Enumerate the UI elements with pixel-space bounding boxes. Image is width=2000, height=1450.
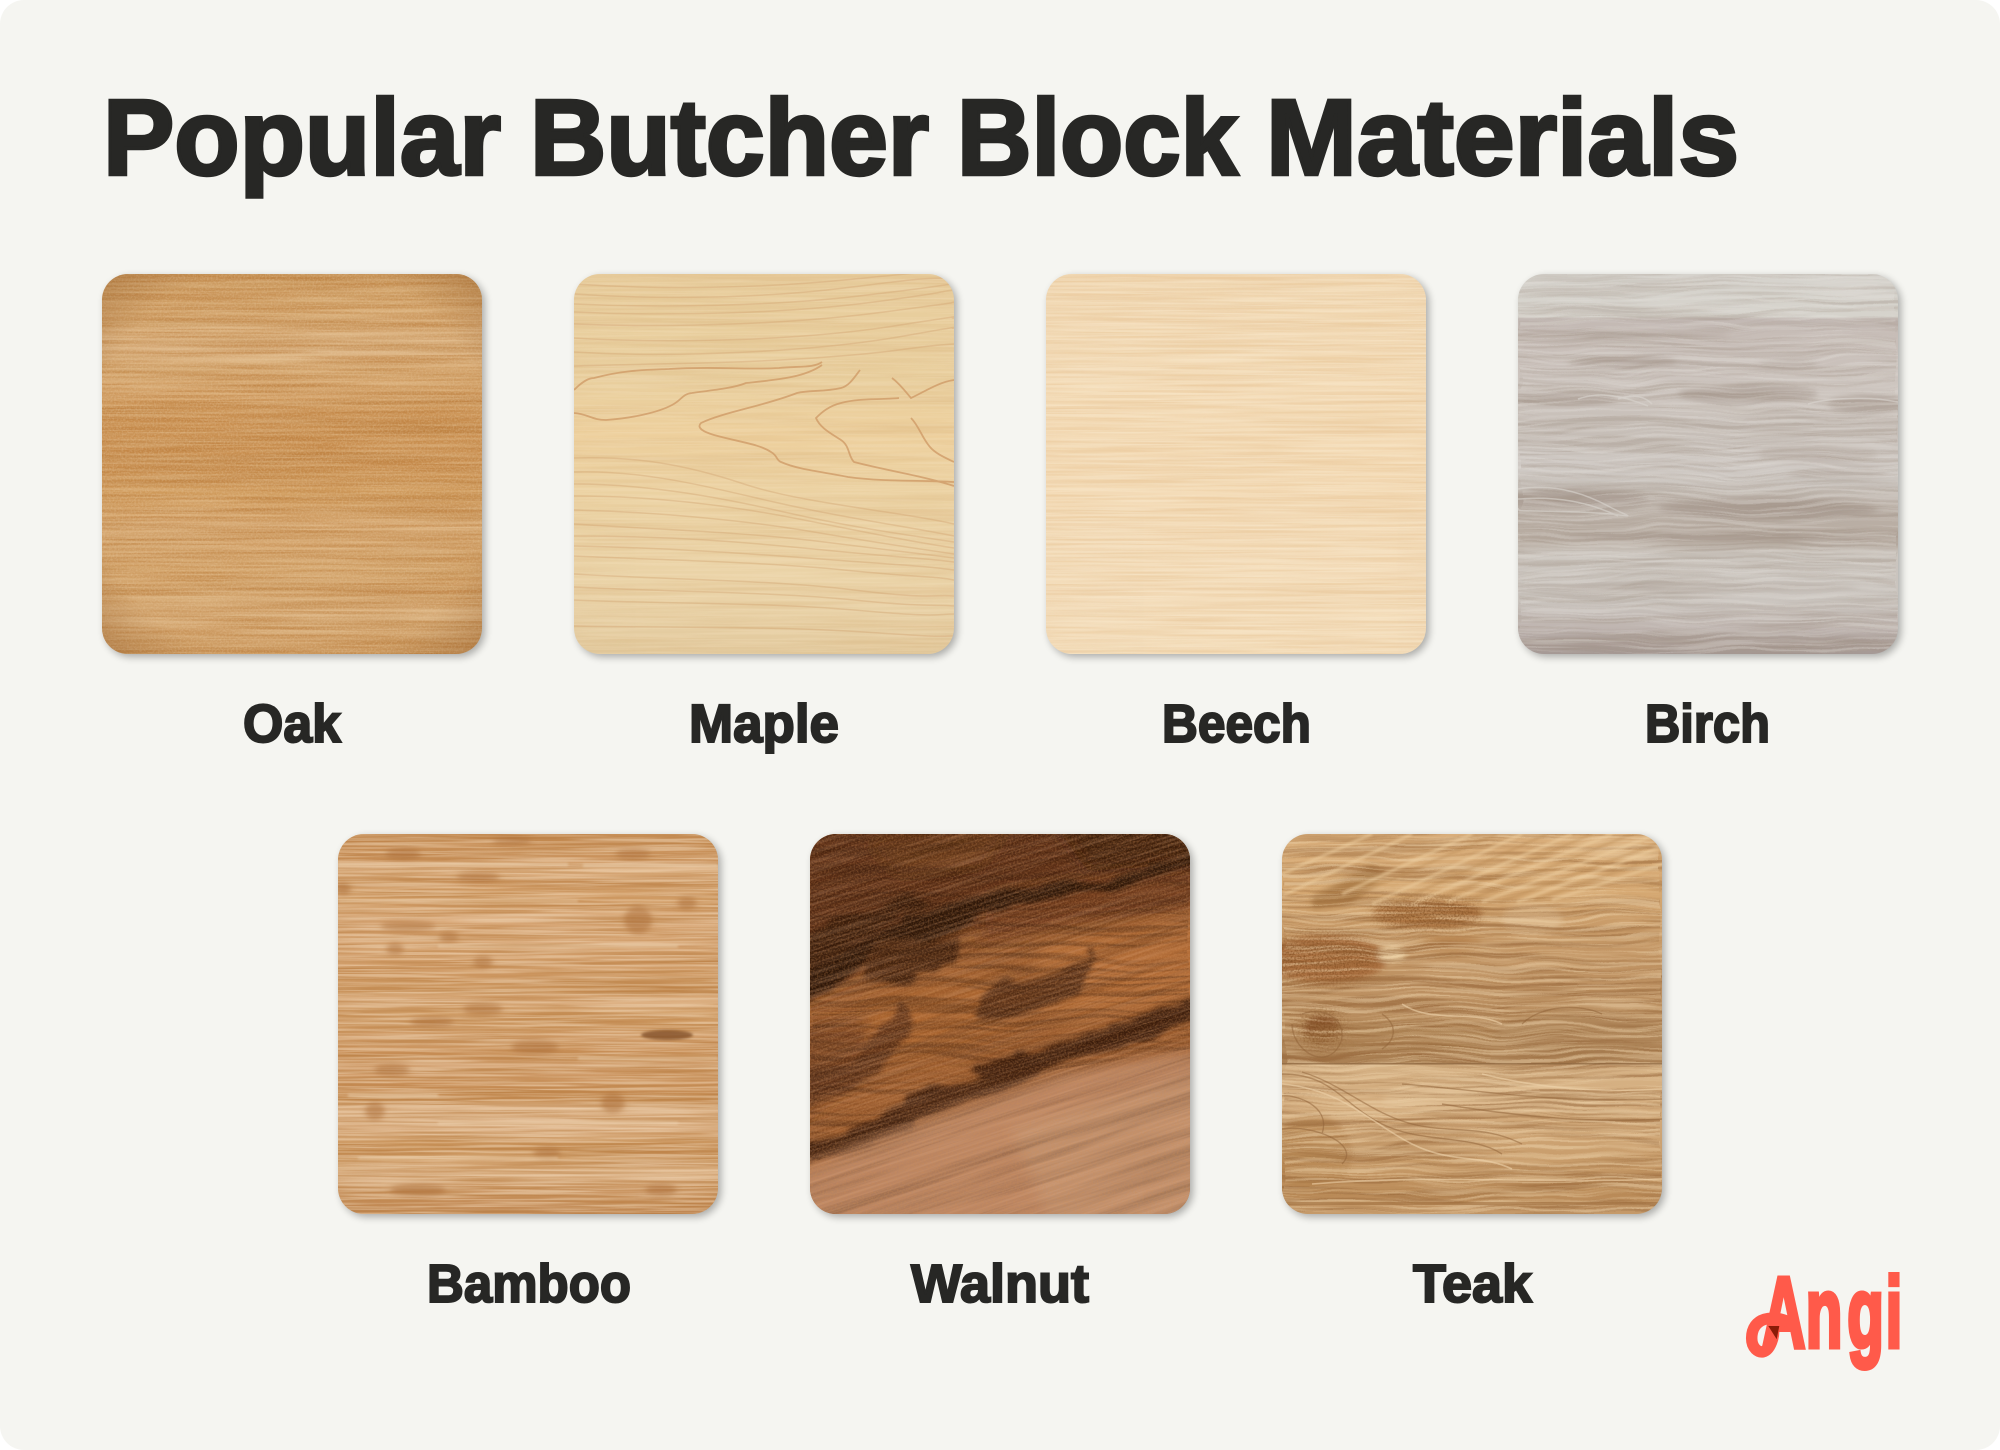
title: Block — [957, 77, 1239, 198]
title: Popular — [103, 77, 501, 198]
label: Oak: Oak — [243, 694, 342, 754]
card: Beech — [1046, 274, 1429, 754]
swatch: beech wood texture — [1046, 274, 1426, 654]
label: Beech: Beech — [1162, 694, 1311, 754]
logo: Angi: Angi — [1762, 1257, 1902, 1369]
label: Maple: Maple — [689, 694, 839, 754]
label: Walnut: Walnut — [911, 1254, 1089, 1314]
label: Teak: Teak — [1413, 1254, 1533, 1314]
swatch: maple wood texture — [574, 272, 959, 654]
card: Maple — [574, 272, 959, 754]
title: Materials — [1266, 77, 1739, 198]
card: Oak — [102, 274, 485, 754]
swatch: oak wood texture — [102, 274, 482, 654]
swatch: walnut wood texture — [810, 834, 1190, 1214]
card: Teak — [1280, 832, 1670, 1304]
swatch: teak wood texture — [1282, 834, 1662, 1214]
title: Butcher — [530, 77, 929, 198]
label: Bamboo: Bamboo — [427, 1254, 631, 1314]
card: Walnut — [808, 832, 1198, 1304]
card: Bamboo — [335, 834, 721, 1314]
swatch: bamboo wood texture — [335, 834, 718, 1214]
swatch: birch wood texture — [1498, 274, 1918, 654]
label: Birch: Birch — [1645, 694, 1770, 754]
card: Birch — [1498, 274, 1918, 754]
